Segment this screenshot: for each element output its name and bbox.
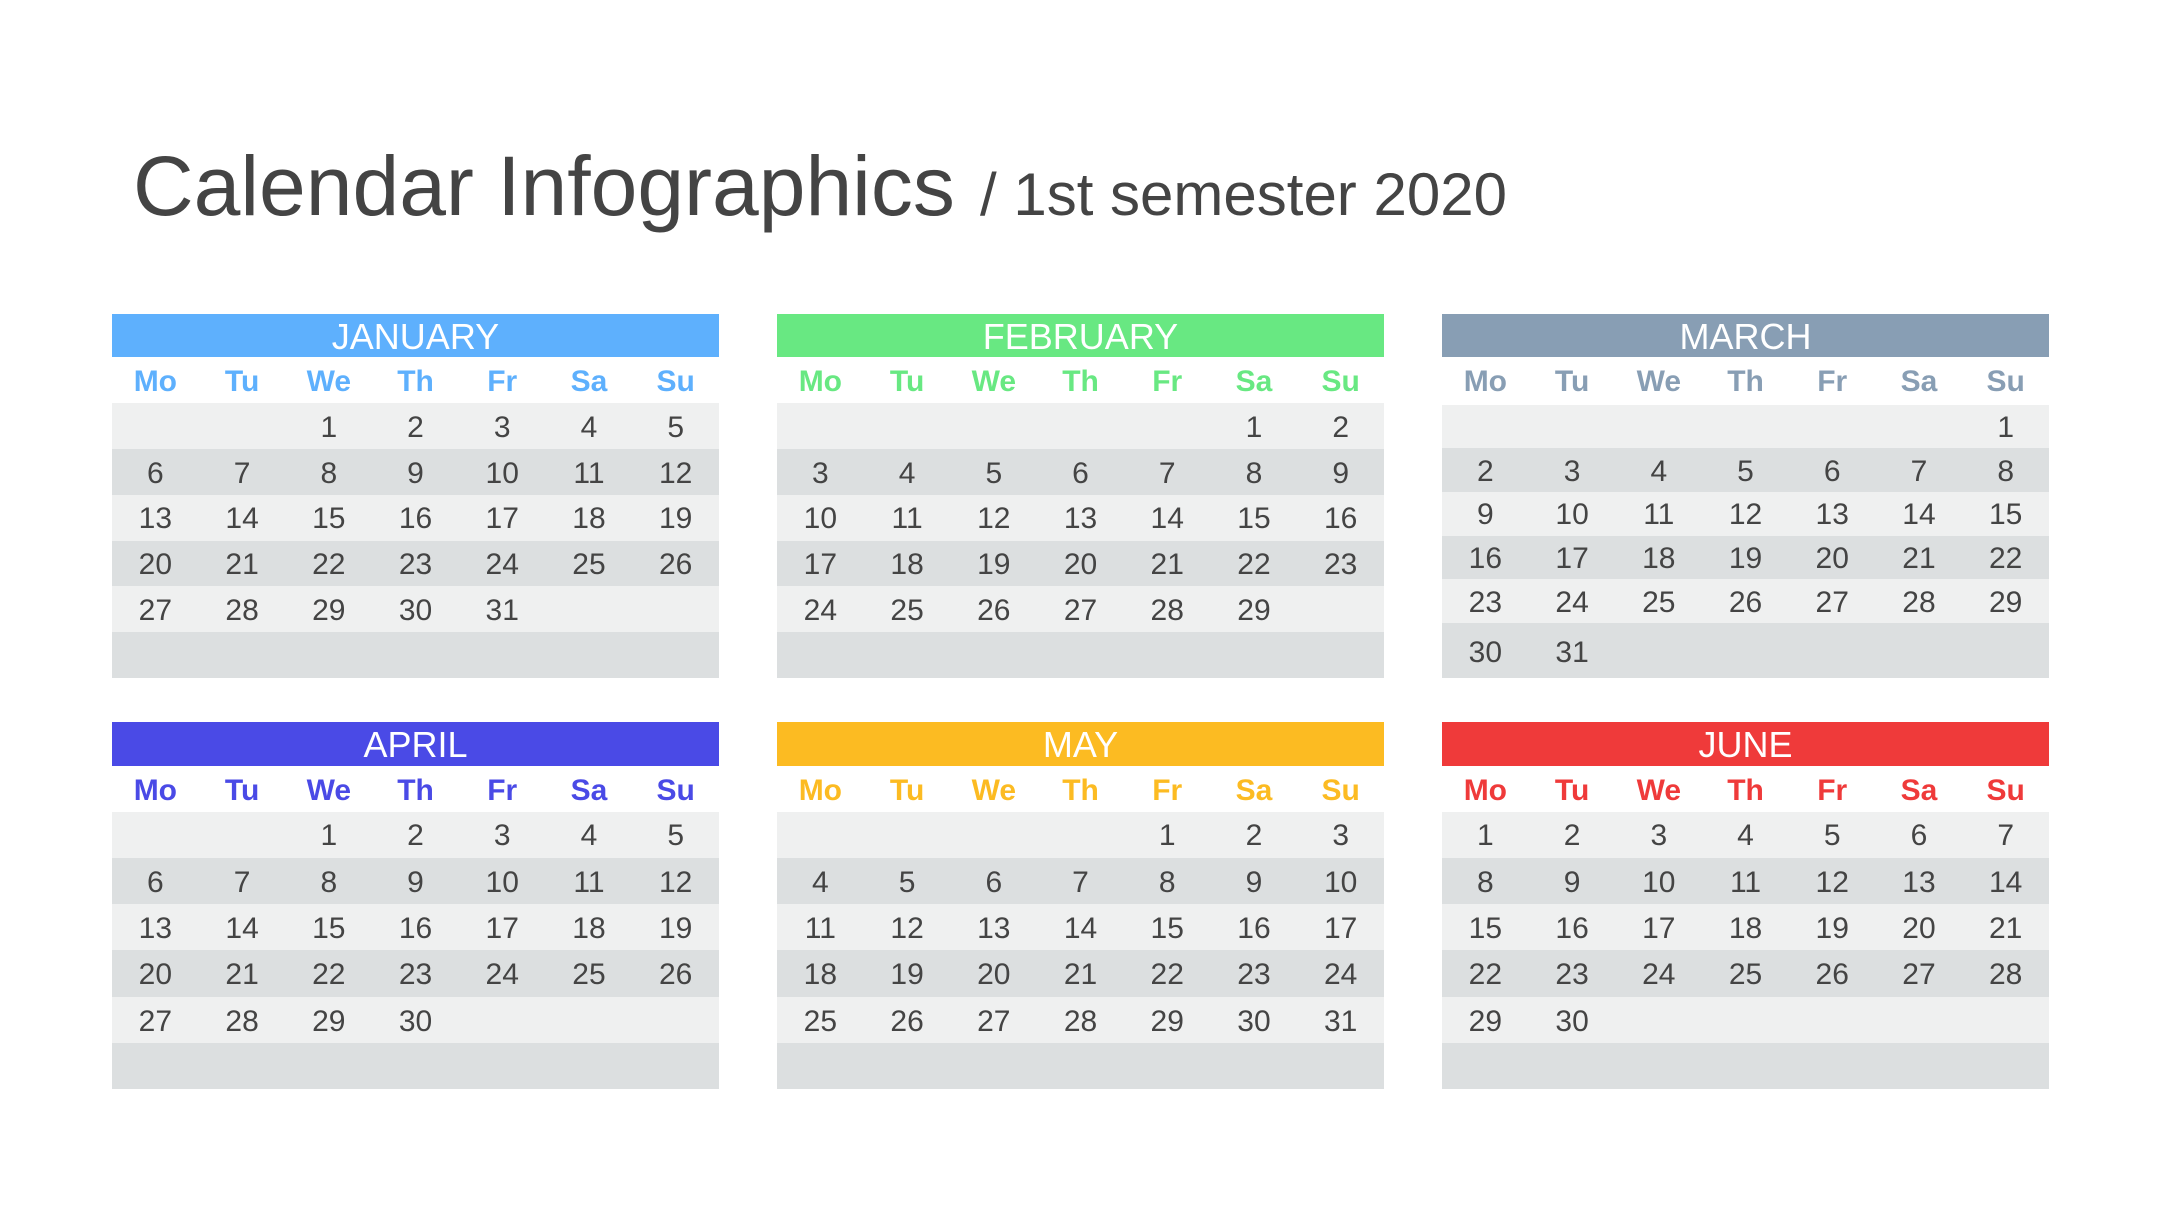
date grid: June: 4 [1737, 819, 1754, 852]
date grid: May: 9 [1246, 866, 1262, 899]
date grid: June: 15 [1469, 912, 1502, 945]
month header: February: FEBRUARY [983, 316, 1178, 357]
date grid: February: 6 [1072, 457, 1089, 490]
weekday labels: January: Fr [487, 365, 517, 398]
date grid: May: 17 [1324, 912, 1357, 945]
date grid: May: 11 [805, 912, 836, 945]
date grid: May: 24 [1324, 958, 1357, 991]
weekday labels: May: Sa [1236, 774, 1272, 807]
date grid: June: 30 [1555, 1005, 1589, 1038]
date grid: April: 6 [147, 866, 164, 899]
weekday labels: March: Th [1727, 365, 1764, 398]
date grid: January: 20 [139, 548, 172, 581]
date grid: January: 2 [407, 411, 424, 444]
date grid: May: 7 [1072, 866, 1089, 899]
month header: April [112, 722, 719, 766]
date grid: June [1442, 812, 2049, 1089]
date grid: March: 1 [1997, 411, 2014, 444]
date grid: February: 22 [1237, 548, 1271, 581]
date grid: April: 14 [225, 912, 259, 945]
date grid: June: 26 [1816, 958, 1849, 991]
date grid: February: 18 [890, 548, 924, 581]
date grid: June: 19 [1816, 912, 1849, 945]
weekday labels: February: Tu [890, 365, 924, 398]
month header: March [1442, 314, 2049, 357]
title: Calendar Infographics [133, 139, 955, 233]
weekday labels: June: Sa [1901, 774, 1937, 807]
date grid: June: 8 [1477, 866, 1494, 899]
date grid: April: 29 [312, 1005, 345, 1038]
date grid: March: 14 [1902, 498, 1936, 531]
date grid: June: 23 [1555, 958, 1589, 991]
date grid: June: 29 [1469, 1005, 1502, 1038]
date grid: June: 25 [1729, 958, 1762, 991]
date grid: May: 15 [1151, 912, 1184, 945]
weekday labels: March: We [1637, 365, 1681, 398]
weekday labels: March: Tu [1555, 365, 1589, 398]
weekday labels: March [1464, 365, 2025, 398]
date grid: June: 22 [1469, 958, 1502, 991]
date grid: January: 30 [399, 594, 432, 627]
date grid: January: 8 [320, 457, 337, 490]
date grid: March: 8 [1997, 455, 2014, 488]
weekday labels: April: Fr [487, 774, 517, 807]
weekday labels: January: Th [397, 365, 434, 398]
date grid: March: 20 [1816, 542, 1849, 575]
date grid: February: 4 [899, 457, 915, 490]
date grid: May: 3 [1332, 819, 1349, 852]
weekday labels: June: Tu [1555, 774, 1589, 807]
weekday labels: May: Tu [890, 774, 924, 807]
weekday labels: June: Fr [1817, 774, 1847, 807]
date grid: May: 12 [890, 912, 924, 945]
date grid: March: 22 [1989, 542, 2022, 575]
weekday labels: April: Sa [571, 774, 607, 807]
date grid: March: 9 [1477, 498, 1494, 531]
date grid: April: 16 [399, 912, 432, 945]
date grid: April: 10 [486, 866, 519, 899]
date grid: May: 18 [804, 958, 837, 991]
weekday labels: June: Mo [1464, 774, 1507, 807]
date grid: February: 1 [1246, 411, 1262, 444]
date grid: January: 16 [399, 502, 432, 535]
date grid: February: 2 [1332, 411, 1349, 444]
date grid: May: 26 [890, 1005, 924, 1038]
date grid: April: 18 [572, 912, 606, 945]
date grid: June: 11 [1730, 866, 1761, 899]
date grid: January: 7 [234, 457, 250, 490]
date grid: May: 30 [1237, 1005, 1271, 1038]
date grid: June: 6 [1911, 819, 1927, 852]
date grid: June: 17 [1642, 912, 1675, 945]
date grid: February: 23 [1324, 548, 1357, 581]
date grid: May: 29 [1151, 1005, 1184, 1038]
date grid: May: 20 [977, 958, 1010, 991]
date grid: March: 5 [1737, 455, 1754, 488]
weekday labels: February: Su [1322, 365, 1360, 398]
date grid: February: 13 [1064, 502, 1097, 535]
panel: January [112, 314, 719, 678]
date grid: March: 6 [1824, 455, 1841, 488]
month header: April: APRIL [363, 724, 468, 765]
date grid: March: 18 [1642, 542, 1675, 575]
date grid: January: 9 [407, 457, 424, 490]
date grid: June: 10 [1642, 866, 1675, 899]
date grid: June: 9 [1564, 866, 1580, 899]
date grid: June: 27 [1902, 958, 1936, 991]
panel: May [777, 722, 1384, 1089]
date grid: May: 23 [1237, 958, 1271, 991]
date grid: March: 4 [1650, 455, 1667, 488]
date grid: April: 7 [234, 866, 250, 899]
date grid: February: 26 [977, 594, 1010, 627]
date grid: June: 7 [1997, 819, 2014, 852]
weekday labels: March: Fr [1817, 365, 1847, 398]
date grid: March: 10 [1555, 498, 1589, 531]
weekday labels: June [1464, 774, 2025, 807]
date grid: May: 16 [1237, 912, 1271, 945]
date grid: March: 30 [1469, 636, 1502, 669]
date grid: January: 18 [572, 502, 606, 535]
date grid: March: 27 [1816, 586, 1849, 619]
month header: May: MAY [1043, 724, 1118, 765]
date grid: January: 29 [312, 594, 345, 627]
weekday labels: January: Mo [134, 365, 177, 398]
date grid: February: 14 [1151, 502, 1184, 535]
date grid: June: 3 [1650, 819, 1667, 852]
date grid: June: 18 [1729, 912, 1762, 945]
date grid: May: 28 [1064, 1005, 1097, 1038]
date grid: February: 21 [1151, 548, 1184, 581]
date grid: April: 9 [407, 866, 424, 899]
date grid: March: 31 [1555, 636, 1589, 669]
date grid: June: 1 [1477, 819, 1494, 852]
date grid: May: 21 [1064, 958, 1097, 991]
date grid: January: 21 [225, 548, 259, 581]
date grid: April: 21 [225, 958, 259, 991]
date grid: March: 26 [1729, 586, 1762, 619]
date grid: March: 16 [1469, 542, 1502, 575]
date grid: January: 23 [399, 548, 432, 581]
weekday labels: March: Mo [1464, 365, 1507, 398]
date grid: March: 11 [1643, 498, 1674, 531]
date grid: May: 5 [899, 866, 915, 899]
date grid: February: 28 [1151, 594, 1184, 627]
date grid: January: 5 [667, 411, 684, 444]
date grid: April: 4 [581, 819, 597, 852]
date grid: June: 24 [1642, 958, 1675, 991]
weekday labels: February: Mo [799, 365, 842, 398]
date grid: May: 10 [1324, 866, 1357, 899]
date grid: January: 6 [147, 457, 164, 490]
date grid: April: 20 [139, 958, 172, 991]
date grid: February: 15 [1237, 502, 1271, 535]
date grid: February: 16 [1324, 502, 1357, 535]
date grid: April: 1 [320, 819, 337, 852]
date grid: March: 24 [1555, 586, 1589, 619]
date grid: February: 7 [1159, 457, 1176, 490]
month header: February [777, 314, 1384, 357]
date grid: June: 20 [1902, 912, 1936, 945]
date grid: February: 11 [892, 502, 923, 535]
weekday labels: March: Su [1986, 365, 2025, 398]
date grid: February: 3 [812, 457, 829, 490]
date grid: April: 27 [139, 1005, 172, 1038]
date grid: March: 23 [1469, 586, 1502, 619]
date grid: May: 2 [1246, 819, 1262, 852]
date grid: January: 11 [573, 457, 605, 490]
date grid: May: 6 [985, 866, 1002, 899]
date grid: May [777, 812, 1384, 1089]
weekday labels: January [134, 365, 695, 398]
date grid: March: 19 [1729, 542, 1762, 575]
weekday labels: May: Su [1322, 774, 1360, 807]
date grid: April: 23 [399, 958, 432, 991]
date grid: January: 24 [486, 548, 519, 581]
date grid: May: 14 [1064, 912, 1097, 945]
date grid: March: 2 [1477, 455, 1494, 488]
date grid: April: 19 [659, 912, 692, 945]
weekday labels: January: Tu [225, 365, 259, 398]
month header: May [777, 722, 1384, 766]
date grid: February: 29 [1237, 594, 1271, 627]
date grid: April: 2 [407, 819, 424, 852]
weekday labels: May: We [972, 774, 1016, 807]
date grid: January [112, 403, 719, 678]
date grid: April: 30 [399, 1005, 432, 1038]
weekday labels: January: Su [656, 365, 695, 398]
date grid: February: 8 [1246, 457, 1262, 490]
date grid: May: 31 [1324, 1005, 1357, 1038]
panel: April [112, 722, 719, 1089]
subtitle: / 1st semester 2020 [980, 161, 1507, 228]
weekday labels: April [134, 774, 695, 807]
date grid: June: 14 [1989, 866, 2022, 899]
weekday labels: February: Th [1062, 365, 1099, 398]
weekday labels: May: Th [1062, 774, 1099, 807]
weekday labels: March: Sa [1901, 365, 1937, 398]
date grid: March: 25 [1642, 586, 1675, 619]
date grid: March: 7 [1911, 455, 1927, 488]
date grid: January: 27 [139, 594, 172, 627]
date grid: June: 13 [1902, 866, 1936, 899]
date grid: May: 19 [890, 958, 924, 991]
date grid: May: 1 [1159, 819, 1176, 852]
date grid: May: 25 [804, 1005, 837, 1038]
date grid: April: 28 [225, 1005, 259, 1038]
date grid: April [112, 812, 719, 1089]
date grid: April: 25 [572, 958, 606, 991]
weekday labels: April: Th [397, 774, 434, 807]
date grid: March: 12 [1729, 498, 1762, 531]
weekday labels: February: We [972, 365, 1016, 398]
date grid: March: 15 [1989, 498, 2022, 531]
date grid: June: 2 [1564, 819, 1580, 852]
date grid: February: 19 [977, 548, 1010, 581]
date grid: January: 14 [225, 502, 259, 535]
month header: March: MARCH [1680, 316, 1812, 357]
date grid: February [777, 403, 1384, 678]
date grid: May: 4 [812, 866, 829, 899]
date grid: April: 22 [312, 958, 345, 991]
weekday labels: February [799, 365, 1360, 398]
date grid: June: 28 [1989, 958, 2022, 991]
date grid: May: 22 [1151, 958, 1184, 991]
date grid: March: 21 [1902, 542, 1936, 575]
weekday labels: May [799, 774, 1360, 807]
date grid: February: 10 [804, 502, 837, 535]
date grid: April: 8 [320, 866, 337, 899]
weekday labels: January: We [307, 365, 351, 398]
date grid: April: 24 [486, 958, 519, 991]
month header: June [1442, 722, 2049, 766]
date grid: January: 13 [139, 502, 172, 535]
date grid: March: 28 [1902, 586, 1936, 619]
weekday labels: May: Fr [1152, 774, 1182, 807]
date grid: March: 17 [1555, 542, 1589, 575]
date grid: January: 3 [494, 411, 511, 444]
date grid: May: 27 [977, 1005, 1010, 1038]
date grid: April: 5 [667, 819, 684, 852]
weekday labels: April: Tu [225, 774, 259, 807]
date grid: April: 3 [494, 819, 511, 852]
date grid: January: 10 [486, 457, 519, 490]
date grid: June: 12 [1816, 866, 1849, 899]
date grid: May: 8 [1159, 866, 1176, 899]
date grid: February: 27 [1064, 594, 1097, 627]
date grid: February: 24 [804, 594, 837, 627]
weekday labels: June: Su [1986, 774, 2025, 807]
date grid: March: 13 [1816, 498, 1849, 531]
date grid: April: 17 [486, 912, 519, 945]
date grid: March: 3 [1564, 455, 1580, 488]
date grid: January: 26 [659, 548, 692, 581]
weekday labels: May: Mo [799, 774, 842, 807]
date grid: April: 15 [312, 912, 345, 945]
date grid: January: 17 [486, 502, 519, 535]
weekday labels: June: Th [1727, 774, 1764, 807]
date grid: February: 17 [804, 548, 837, 581]
date grid: June: 5 [1824, 819, 1841, 852]
weekday labels: April: Su [656, 774, 695, 807]
date grid: January: 22 [312, 548, 345, 581]
date grid: January: 19 [659, 502, 692, 535]
date grid: February: 9 [1332, 457, 1349, 490]
date grid: January: 31 [486, 594, 519, 627]
weekday labels: February: Fr [1152, 365, 1182, 398]
date grid: February: 25 [890, 594, 924, 627]
panel: February [777, 314, 1384, 678]
weekday labels: April: We [307, 774, 351, 807]
date grid: June: 21 [1989, 912, 2022, 945]
weekday labels: April: Mo [134, 774, 177, 807]
month header: June: JUNE [1698, 724, 1792, 765]
date grid: April: 13 [139, 912, 172, 945]
month header: January: JANUARY [332, 316, 499, 357]
panel: June [1442, 722, 2049, 1089]
date grid: January: 4 [581, 411, 597, 444]
date grid: April: 11 [573, 866, 605, 899]
date grid: January: 1 [320, 411, 337, 444]
date grid: January: 28 [225, 594, 259, 627]
weekday labels: February: Sa [1236, 365, 1272, 398]
date grid: January: 12 [659, 457, 692, 490]
date grid: April: 26 [659, 958, 692, 991]
date grid: February: 20 [1064, 548, 1097, 581]
date grid: January: 15 [312, 502, 345, 535]
weekday labels: June: We [1637, 774, 1681, 807]
date grid: March [1442, 405, 2049, 678]
panel: March [1442, 314, 2049, 678]
date grid: April: 12 [659, 866, 692, 899]
date grid: May: 13 [977, 912, 1010, 945]
month header: January [112, 314, 719, 357]
date grid: February: 12 [977, 502, 1010, 535]
weekday labels: January: Sa [571, 365, 607, 398]
date grid: January: 25 [572, 548, 606, 581]
date grid: June: 16 [1555, 912, 1589, 945]
date grid: March: 29 [1989, 586, 2022, 619]
date grid: February: 5 [985, 457, 1002, 490]
